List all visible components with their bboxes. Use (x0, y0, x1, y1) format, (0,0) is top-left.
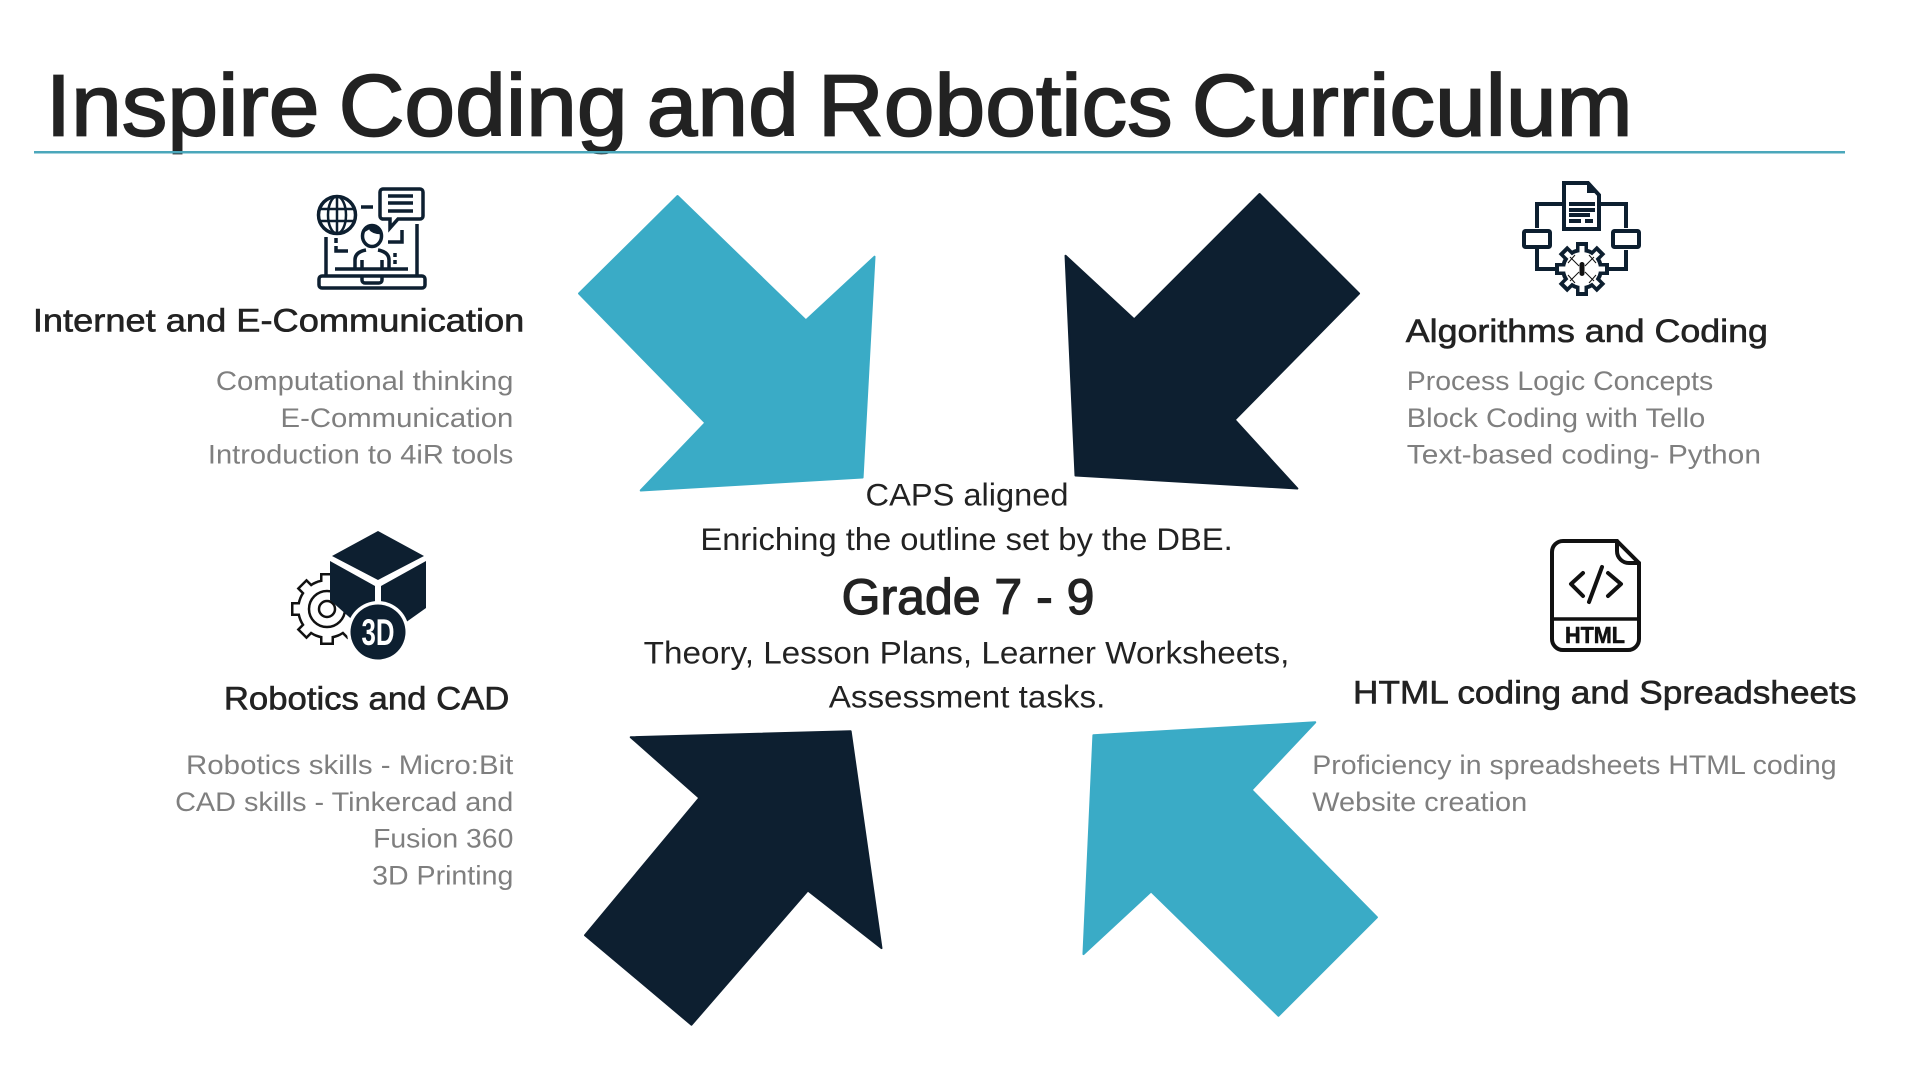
text: algorithms and coding details: Text-based coding- Python (1407, 440, 1761, 470)
centre text block: CAPS aligned (866, 476, 1069, 512)
heading: algorithms and coding: Algorithms and Coding (1406, 312, 1768, 349)
text: html coding and spreadsheets details: Proficiency in spreadsheets HTML coding (1312, 750, 1837, 780)
centre text block (644, 476, 1289, 714)
title: Inspire Coding and Robotics Curriculum (46, 56, 1633, 154)
arrow: bottom left (585, 731, 881, 1025)
centre text block: Assessment tasks. (829, 678, 1105, 714)
arrow: bottom right (1083, 722, 1377, 1016)
text: robotics and cad details: 3D Printing (372, 860, 513, 890)
text: html coding and spreadsheets details (1312, 750, 1837, 817)
icon: robotics and cad (291, 531, 426, 663)
text: robotics and cad details: CAD skills - Tinkercad and (175, 787, 513, 817)
text: internet and e-communication details: Computational thinking (216, 366, 513, 396)
text: robotics and cad details: Fusion 360 (373, 824, 513, 854)
centre text block: Grade 7 - 9 (842, 569, 1094, 625)
text: internet and e-communication details: Introduction to 4iR tools (208, 440, 513, 470)
text: algorithms and coding details: Block Coding with Tello (1407, 403, 1705, 433)
icon: algorithms and coding (1524, 183, 1639, 296)
icon: html file (1552, 541, 1639, 650)
text: internet and e-communication details (208, 366, 513, 470)
text: algorithms and coding details (1407, 366, 1761, 470)
arrow: top right (1066, 194, 1359, 488)
icon: robotics and cad: 3D (362, 612, 394, 653)
icon: html file: HTML (1565, 622, 1625, 648)
text: robotics and cad details (175, 750, 514, 890)
text: html coding and spreadsheets details: Website creation (1312, 787, 1527, 817)
text: robotics and cad details: Robotics skills - Micro:Bit (186, 750, 514, 780)
centre text block: Enriching the outline set by the DBE. (700, 521, 1233, 557)
heading: html coding and spreadsheets: HTML coding and Spreadsheets (1353, 673, 1856, 710)
heading: internet and e-communication: Internet and E-Communication (33, 301, 524, 338)
icon: internet and e-communication (318, 189, 425, 288)
text: internet and e-communication details: E-Communication (281, 403, 513, 433)
text: algorithms and coding details: Process Logic Concepts (1407, 366, 1713, 396)
heading: robotics and cad: Robotics and CAD (224, 679, 509, 716)
arrow: top left (579, 196, 875, 490)
centre text block: Theory, Lesson Plans, Learner Worksheets, (644, 635, 1289, 671)
